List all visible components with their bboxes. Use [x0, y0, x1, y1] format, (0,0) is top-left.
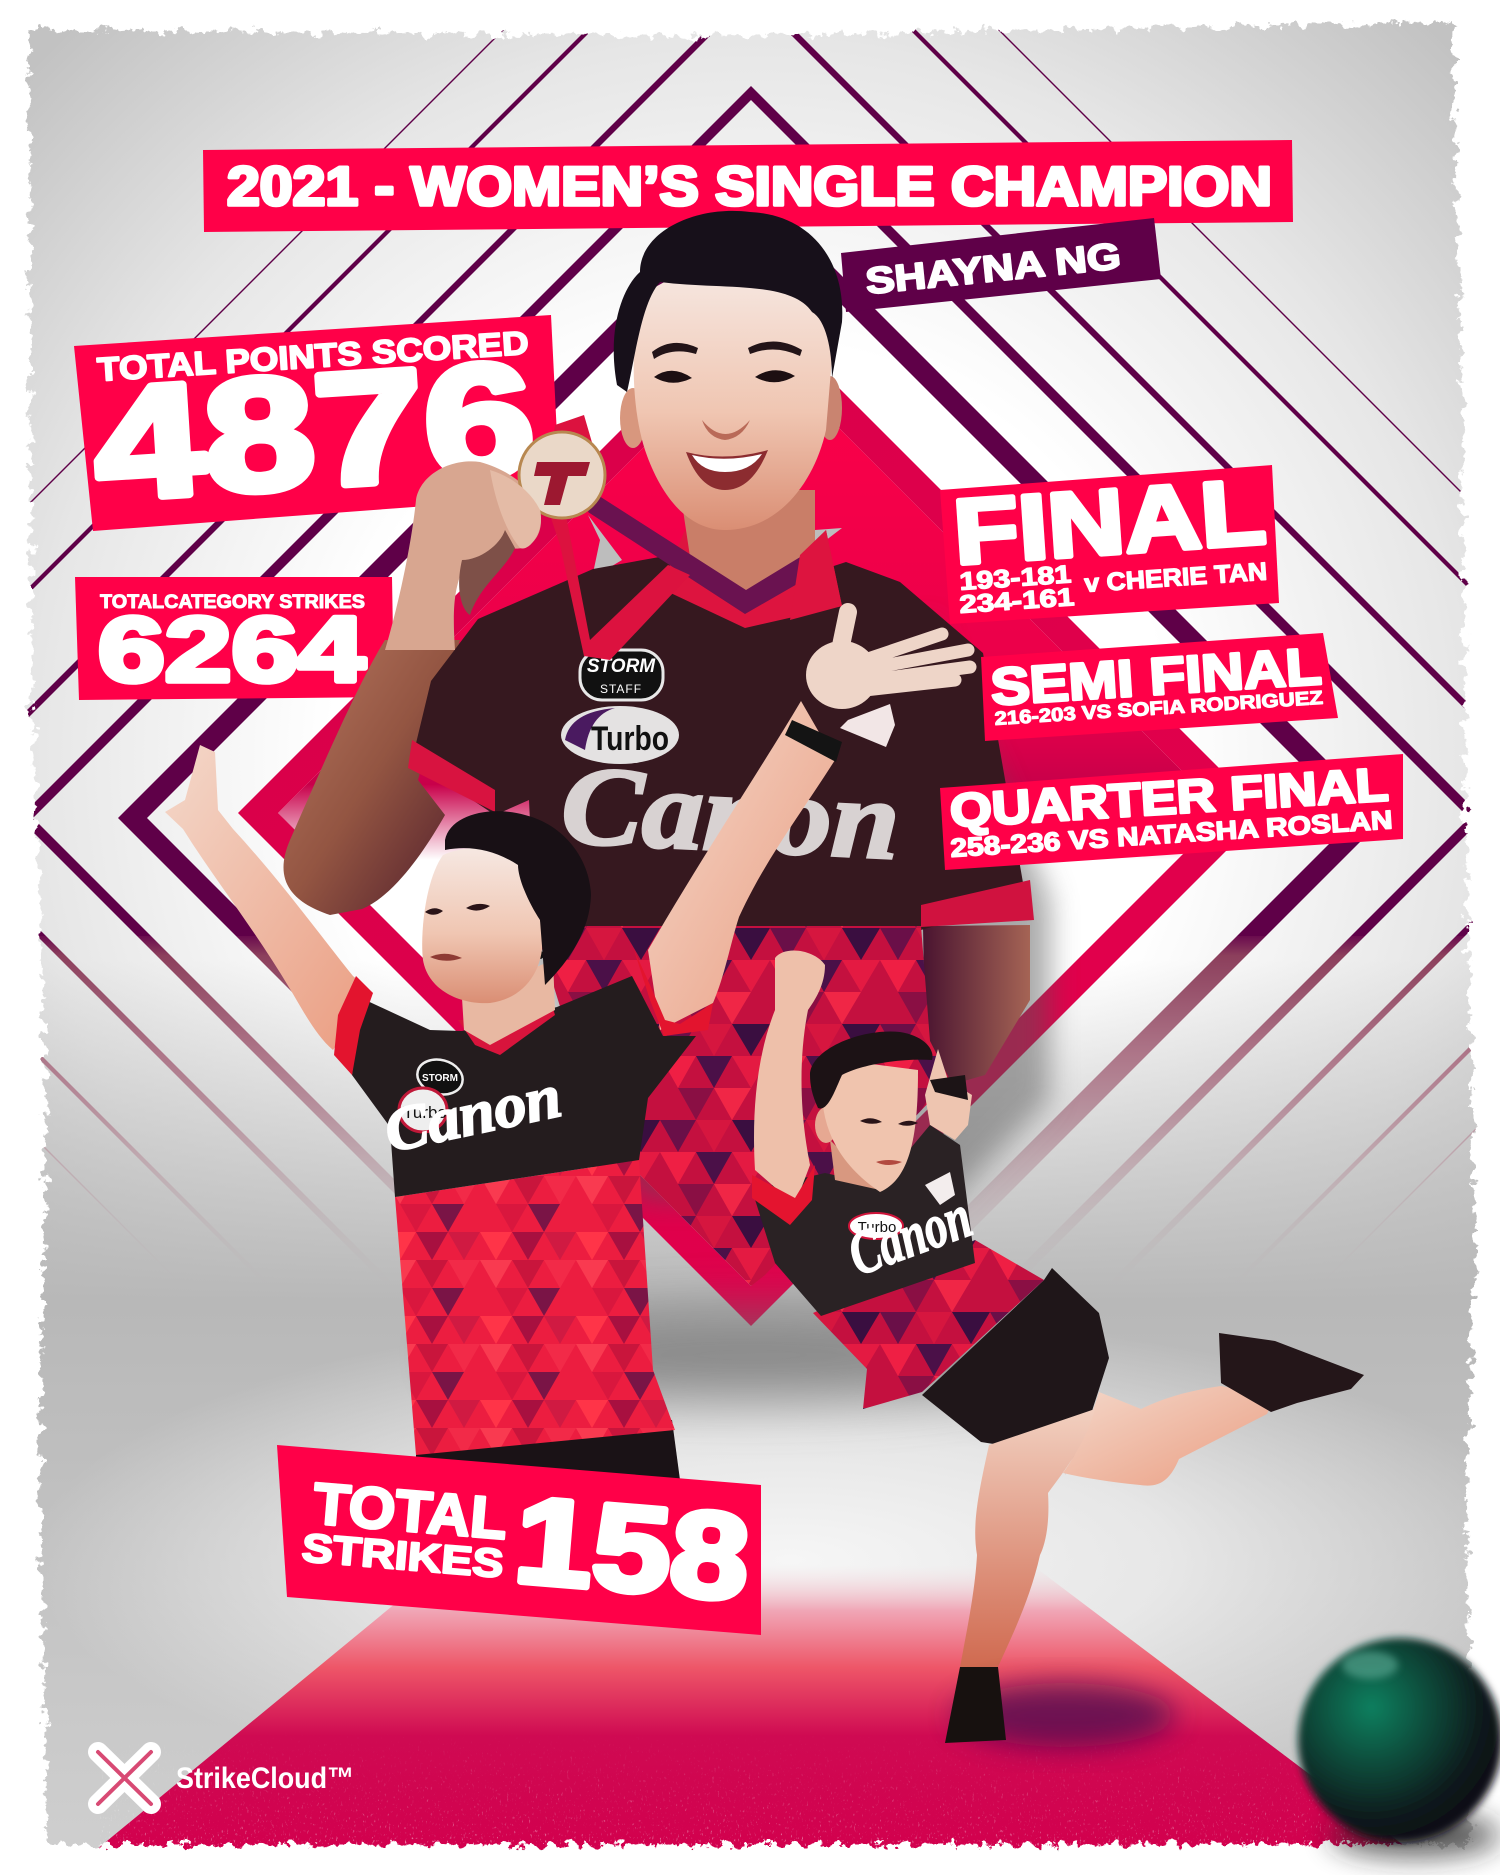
eyes [425, 904, 490, 915]
storm label: STORM [587, 656, 656, 677]
eyebrows [652, 341, 802, 359]
number: 158 [510, 1471, 754, 1626]
result box: final [940, 461, 1279, 624]
right sleeve cuff [921, 880, 1034, 927]
name text: SHAYNA NG [864, 235, 1122, 302]
lane speckle [100, 1742, 1394, 1851]
floor shadow behind figures [450, 1313, 1050, 1397]
neck [462, 960, 555, 1045]
ball shadow [1330, 1813, 1500, 1857]
right sleeve cuff [634, 950, 713, 1036]
name banner [841, 218, 1161, 312]
storm badge [413, 1055, 467, 1099]
teeth [692, 454, 762, 472]
turbo badge [561, 706, 679, 764]
right ear [818, 376, 842, 440]
jersey red lower [395, 1160, 675, 1455]
lips [430, 954, 462, 961]
thumb [490, 470, 541, 548]
number: 6264 [98, 599, 365, 701]
ear [815, 1107, 837, 1143]
StrikeCloud logo [98, 1752, 354, 1804]
neck [830, 1140, 880, 1190]
turbo label: Turbo [591, 720, 669, 758]
left sleeve cuff [408, 740, 495, 812]
storm staff badge [580, 650, 663, 700]
medal ribbon: purple strap [588, 494, 825, 614]
back leg [1063, 1386, 1275, 1486]
lower right arm [923, 925, 1030, 1085]
second figure: arms raised [165, 612, 970, 1480]
ear [542, 914, 570, 962]
opponent: v CHERIE TAN [1084, 558, 1268, 598]
flag patch [925, 1172, 955, 1205]
strikes label: STRIKES [300, 1526, 505, 1587]
raised arm [754, 951, 825, 1205]
collar [458, 1005, 555, 1055]
palm shadow [459, 530, 515, 615]
upper left arm [283, 640, 460, 915]
hair [445, 811, 591, 985]
raised shoe [1219, 1333, 1364, 1412]
neck [680, 490, 815, 612]
game score two: 234-161 [959, 583, 1075, 619]
third figure: bowling delivery [752, 951, 1364, 1747]
semi final heading: SEMI FINAL [989, 638, 1323, 717]
nose [702, 420, 750, 440]
face [822, 1060, 918, 1192]
staff label: STAFF [600, 682, 642, 696]
turbo label: Turbo [858, 1219, 896, 1236]
main figure: Shayna with medal [283, 211, 1050, 1286]
forearm and hand [385, 461, 541, 650]
body shadow [500, 620, 1050, 1200]
bowling lane [96, 1500, 1410, 1850]
jersey dark top [352, 976, 696, 1197]
shorts [416, 1420, 680, 1480]
shoe shadow [955, 1683, 1175, 1747]
right arm [648, 701, 835, 1030]
number: 4876 [89, 328, 539, 534]
left sleeve cuff [334, 976, 373, 1075]
eyes [654, 370, 795, 383]
mouth [876, 1160, 902, 1165]
turbo badge [849, 1213, 903, 1239]
medal ribbon: red straps [545, 415, 690, 660]
quarter final score: 258-236 VS NATASHA ROSLAN [949, 804, 1393, 863]
stat box: total points scored [74, 315, 560, 534]
semi final score: 216-203 VS SOFIA RODRIGUEZ [994, 688, 1324, 730]
game score one: 193-181 [959, 560, 1072, 596]
stat box: total strikes [277, 1445, 761, 1635]
turbo badge [399, 1088, 447, 1132]
jersey dark top [412, 556, 1026, 930]
result box: semi final [981, 633, 1338, 741]
shorts [922, 1268, 1109, 1475]
watch [785, 720, 842, 762]
title text: 2021 - WOMEN’S SINGLE CHAMPION [227, 155, 1272, 217]
total label: TOTAL [311, 1471, 510, 1552]
collar [660, 530, 842, 628]
ball [1298, 1638, 1500, 1842]
watch [930, 1075, 968, 1100]
flag patch [840, 704, 895, 747]
standing leg [960, 1409, 1095, 1667]
sleeve trim [752, 1165, 815, 1225]
final heading: FINAL [950, 461, 1269, 584]
hair [614, 211, 842, 392]
eyes [860, 1118, 918, 1126]
gray star notches behind neck [588, 493, 842, 578]
ball highlight [1342, 1651, 1398, 1679]
canon wordmark: Canon [379, 1062, 567, 1166]
quarter final heading: QUARTER FINAL [948, 757, 1390, 837]
red diamond [238, 300, 1264, 1326]
title banner [203, 140, 1293, 232]
left ear [620, 388, 646, 448]
standing shoe [945, 1667, 1006, 1743]
wordmark: StrikeCloud™ [176, 1762, 354, 1795]
face [634, 267, 836, 530]
bowling ball [1298, 1638, 1500, 1857]
result box: quarter final [940, 754, 1403, 870]
jersey red lower [813, 1240, 1044, 1409]
storm label: STORM [422, 1073, 458, 1084]
far arm [925, 1049, 972, 1140]
earring [813, 435, 823, 445]
canon wordmark: Canon [840, 1183, 980, 1289]
hand [806, 612, 970, 709]
face [422, 848, 543, 1003]
label: TOTAL POINTS SCORED [96, 324, 530, 388]
earring [536, 951, 544, 959]
left arm [165, 745, 373, 1050]
medal [519, 432, 605, 518]
jersey dark top [752, 1125, 975, 1316]
jersey red lower [535, 926, 950, 1286]
canon wordmark: Canon [559, 743, 902, 883]
medal mark [534, 462, 590, 505]
smile [686, 450, 768, 490]
icon: X mark [98, 1752, 151, 1804]
label: TOTALCATEGORY STRIKES [100, 592, 365, 613]
hair [810, 1032, 933, 1108]
turbo label: Turbo [403, 1103, 447, 1122]
stat box: total category strikes [75, 577, 394, 701]
